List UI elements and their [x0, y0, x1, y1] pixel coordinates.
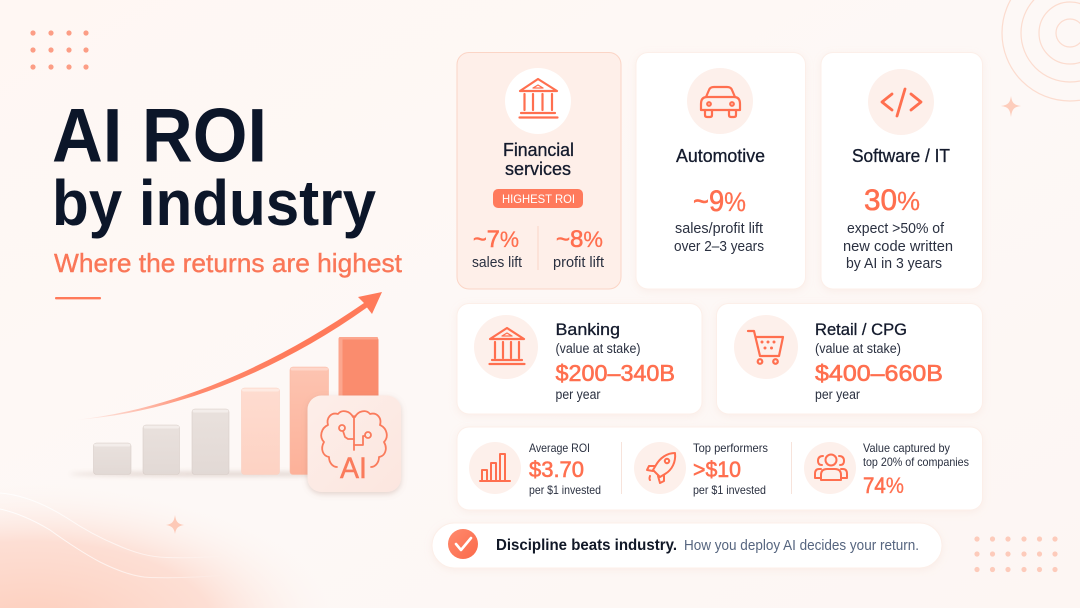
stat: sales lift: [472, 226, 522, 271]
icon: brain: [321, 411, 387, 467]
decorative dot grid top left: [30, 30, 89, 70]
description: [674, 221, 764, 255]
icon: check: [448, 529, 478, 559]
heading: Retail / CPG: [815, 320, 907, 339]
stat: top performers: >$10: [693, 457, 741, 482]
stat: average ROI: $3.70: [529, 457, 584, 482]
callout text: [496, 537, 919, 554]
stat: value captured: top 20% of companies: [863, 455, 969, 469]
stat: value captured: Value captured by: [863, 441, 950, 455]
sparkle top right: [1001, 96, 1021, 117]
AI label: AI: [340, 452, 367, 485]
note: (value at stake): [556, 341, 640, 356]
panel: financial services: [457, 52, 621, 289]
stat: average ROI: Average ROI: [529, 441, 590, 455]
unit: per year: [815, 387, 860, 402]
title: [52, 94, 376, 239]
stat: top performers: Top performers: [693, 441, 768, 455]
panel: retail / CPG: [716, 304, 982, 414]
panel: software / IT: [821, 52, 982, 289]
stat: profit lift: ~8%: [556, 226, 603, 253]
stat: profit lift: profit lift: [553, 255, 604, 271]
description: expect >50% of: [847, 221, 945, 237]
heading: [503, 140, 574, 179]
stat: value captured: [804, 441, 969, 498]
bar 6: [338, 337, 378, 407]
unit: per year: [556, 387, 601, 402]
callout: discipline beats industry: [432, 523, 942, 568]
value: $200–340B: [556, 360, 675, 386]
stat: top performers: [634, 441, 768, 497]
heading: Banking: [556, 320, 620, 339]
heading: services: [505, 159, 571, 179]
stat: sales lift: ~7%: [473, 226, 519, 253]
icon: bank: [474, 315, 538, 379]
bar 4: [242, 388, 280, 474]
panel: banking: [457, 304, 702, 414]
description: [843, 221, 953, 272]
growth arrow: [75, 292, 382, 420]
stat: profit lift: [553, 226, 604, 271]
badge: highest ROI: HIGHEST ROI: [502, 192, 575, 206]
icon: code: [868, 69, 934, 135]
decorative dot grid bottom right: [974, 536, 1058, 572]
description: sales/profit lift: [675, 221, 763, 237]
bar 1: [94, 443, 131, 474]
description: new code written: [843, 239, 953, 255]
description: over 2–3 years: [674, 239, 764, 255]
title: by industry: [52, 167, 376, 239]
bar chart illustration: [70, 337, 380, 476]
panel: ROI statistics: [457, 427, 982, 510]
description: by AI in 3 years: [846, 256, 942, 272]
AI brain tile: [308, 396, 401, 492]
sparkle bottom left: [166, 515, 184, 534]
bar 2: [143, 425, 180, 474]
icon: car: [687, 68, 753, 134]
note: (value at stake): [815, 341, 901, 356]
stat: average ROI: per $1 invested: [529, 483, 601, 497]
bar 3: [192, 409, 229, 474]
stat value: 30%: [864, 184, 920, 217]
decorative rings top right: [1002, 0, 1080, 102]
stat: sales lift: sales lift: [472, 255, 522, 271]
heading: Automotive: [676, 146, 765, 166]
callout text: How you deploy AI decides your return.: [684, 538, 919, 554]
callout text: Discipline beats industry.: [496, 537, 677, 554]
accent rule: [55, 297, 101, 299]
icon: cart: [734, 315, 798, 379]
stat: average ROI: [469, 441, 601, 497]
badge: highest ROI: [493, 189, 583, 208]
icon: bank: [505, 68, 571, 134]
panel: automotive: [636, 52, 806, 289]
value: $400–660B: [815, 360, 943, 386]
heading: Software / IT: [852, 146, 950, 166]
stat: top performers: per $1 invested: [693, 483, 766, 497]
stat: value captured: 74%: [863, 473, 904, 498]
stat value: ~9%: [693, 185, 746, 218]
subtitle: Where the returns are highest: [54, 248, 403, 278]
bar 5: [290, 367, 328, 474]
title: AI ROI: [52, 94, 267, 178]
heading: Financial: [503, 140, 574, 160]
